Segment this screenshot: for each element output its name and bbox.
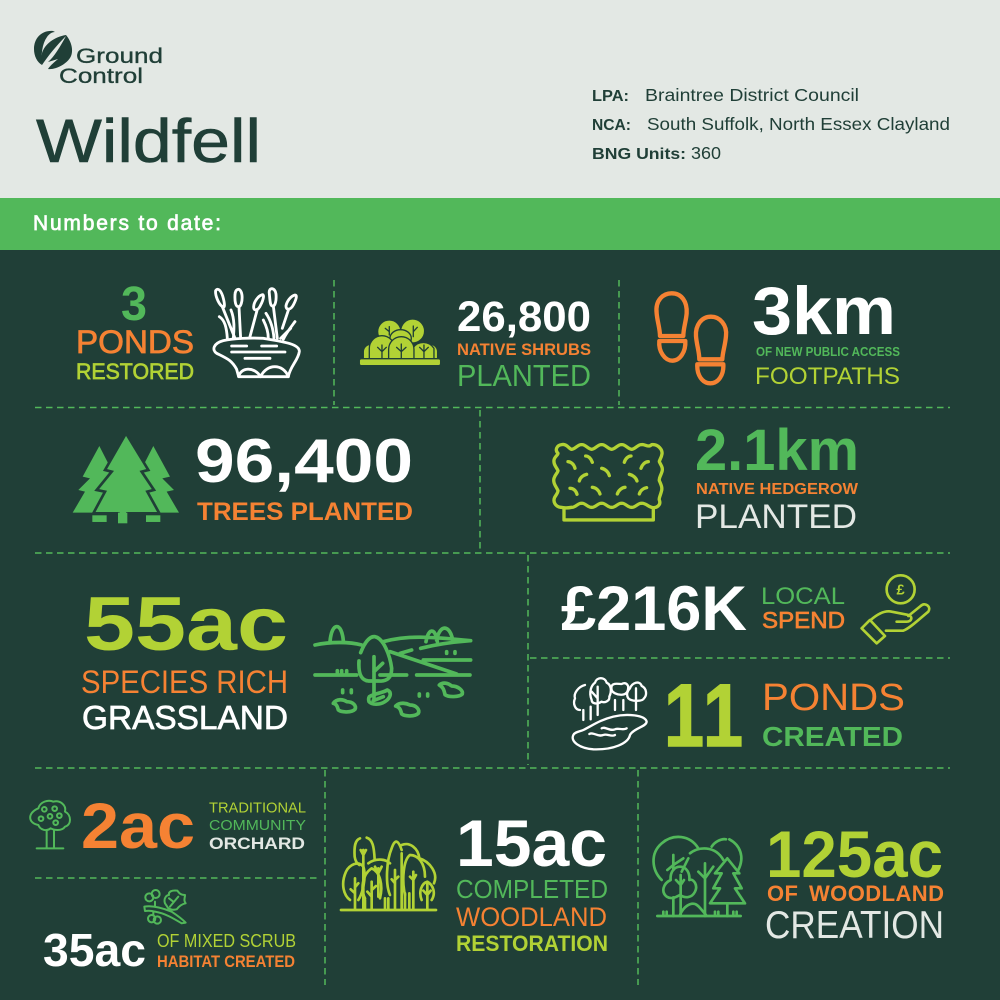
stat: 3 ponds restored [76, 278, 299, 384]
stat: 2ac traditional community orchard: ORCHARD [209, 834, 305, 853]
title: Wildfell [36, 107, 261, 175]
stat: 55ac species rich grassland: GRASSLAND [82, 699, 288, 736]
stat: 35ac mixed scrub habitat created: OF MIXED SCRUB [157, 931, 296, 951]
stat: 125ac woodland creation: OF WOODLAND [767, 881, 944, 906]
icon: grassland landscape [315, 627, 471, 716]
stat: 15ac completed woodland restoration [341, 806, 608, 956]
stat: 2.1km native hedgerow planted [554, 418, 859, 536]
stat: £216K local spend [561, 574, 929, 644]
logo: Ground Control [34, 31, 163, 88]
stat: 26,800 native shrubs planted: PLANTED [457, 358, 591, 393]
stat: 11 ponds created [573, 665, 905, 765]
logo: Ground Control: Control [59, 65, 143, 88]
stat: 3 ponds restored: 3 [121, 278, 147, 331]
stat: 15ac completed woodland restoration: 15ac [456, 806, 607, 880]
icon: pond with trees [573, 678, 647, 749]
stat: 11 ponds created: 1 [703, 665, 743, 765]
stat: £216K local spend: SPEND [762, 607, 845, 633]
icon: hand with pound coin: £ [897, 583, 905, 599]
stat: 3 ponds restored: PONDS [76, 324, 194, 360]
header panel [0, 0, 1000, 198]
stat: 125ac woodland creation [654, 817, 944, 947]
stat: 11 ponds created: 1 [664, 665, 704, 765]
stat: 26,800 native shrubs planted: NATIVE SHRUBS [457, 340, 591, 359]
project details: 360 [691, 143, 721, 163]
stat: 2ac traditional community orchard: COMMUNITY [209, 817, 306, 834]
stat: 55ac species rich grassland: 55ac [84, 582, 288, 667]
stat: 125ac woodland creation: 125ac [766, 817, 943, 891]
stat: 26,800 native shrubs planted [360, 293, 591, 393]
stat: 2.1km native hedgerow planted: PLANTED [695, 498, 857, 536]
stat: 3km footpaths: FOOTPATHS [755, 363, 900, 390]
stat: 15ac completed woodland restoration: COMPLETED [456, 874, 608, 904]
stat: 2ac traditional community orchard [30, 790, 306, 862]
stat: 2ac traditional community orchard: TRADITIONAL [209, 800, 306, 816]
icon: berry branch [144, 890, 186, 924]
stat: 2.1km native hedgerow planted: 2.1km [695, 418, 859, 483]
stat: 11 ponds created: CREATED [762, 721, 903, 752]
stat: £216K local spend: LOCAL [761, 583, 845, 610]
project details: LPA: [592, 88, 629, 105]
icon: hand with pound coin [862, 575, 929, 643]
project details: Braintree District Council [645, 85, 859, 105]
stat: 3km footpaths [656, 273, 900, 390]
stat: 2ac traditional community orchard: 2ac [81, 790, 195, 862]
stat: 11 ponds created: PONDS [762, 677, 905, 719]
icon: pine trees [73, 433, 179, 523]
stat: 96,400 trees planted: TREES PLANTED [197, 498, 413, 526]
icon: hedgerow [554, 444, 662, 520]
stat: 35ac mixed scrub habitat created: 35ac [43, 924, 146, 976]
icon: orchard tree [30, 801, 70, 848]
stat: £216K local spend: £216K [561, 574, 747, 644]
project details [592, 85, 950, 163]
stat: 3km footpaths: 3km [752, 273, 896, 349]
icon: shrubs [360, 319, 440, 365]
stat: 125ac woodland creation: CREATION [765, 904, 944, 947]
stat: 3km footpaths: OF NEW PUBLIC ACCESS [756, 344, 900, 359]
icon: reeds and pond [214, 289, 299, 377]
section banner [0, 198, 1000, 250]
stat: 2.1km native hedgerow planted: NATIVE HEDGEROW [696, 481, 859, 498]
icon: woodland trees [341, 838, 436, 910]
icon: footprints [656, 293, 726, 383]
stat: 35ac mixed scrub habitat created [43, 890, 296, 976]
stat: 96,400 trees planted [73, 427, 413, 526]
project details: NCA: [592, 117, 631, 134]
stat: 35ac mixed scrub habitat created: HABITAT CREATED [157, 952, 295, 971]
stat: 15ac completed woodland restoration: RESTORATION [456, 931, 608, 956]
stat: 55ac species rich grassland: SPECIES RICH [81, 664, 288, 700]
icon: mixed forest [654, 837, 745, 916]
stat: 55ac species rich grassland [81, 582, 471, 736]
project details: BNG Units: [592, 146, 686, 163]
stat: 15ac completed woodland restoration: WOODLAND [456, 902, 607, 932]
section banner: Numbers to date: [33, 212, 221, 235]
logo: Ground Control: Ground [76, 45, 163, 68]
stat: 96,400 trees planted: 96,400 [195, 427, 413, 496]
stat: 3 ponds restored: RESTORED [76, 359, 194, 384]
stat: 26,800 native shrubs planted: 26,800 [457, 293, 591, 341]
project details: South Suffolk, North Essex Clayland [647, 114, 950, 134]
